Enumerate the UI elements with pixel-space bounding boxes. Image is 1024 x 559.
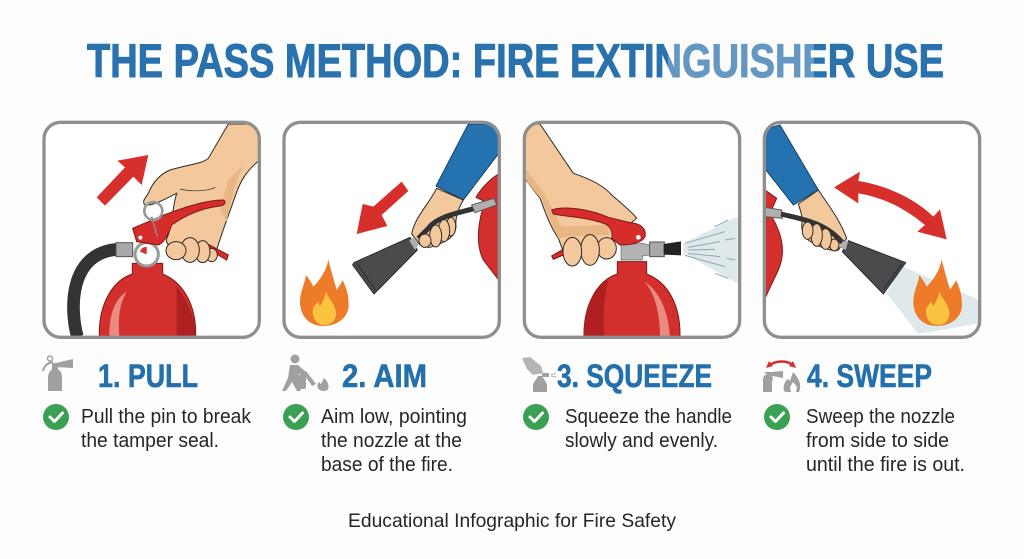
spray — [683, 217, 738, 283]
panel: aim illustration — [284, 122, 500, 337]
text block: aim: base of the fire. — [321, 454, 453, 476]
step heading: squeeze: 3. SQUEEZE — [557, 358, 712, 394]
step heading: sweep: 4. SWEEP — [807, 358, 932, 394]
text block: pull: Pull the pin to break — [81, 406, 252, 428]
icon: hand squeezing — [522, 357, 556, 392]
hand — [798, 190, 847, 250]
text block: squeeze: slowly and evenly. — [565, 430, 718, 452]
text block: squeeze — [565, 406, 732, 452]
sleeve — [763, 125, 818, 205]
arrow: aim low — [357, 182, 408, 234]
check icon: pull — [43, 404, 69, 430]
text block: sweep: from side to side — [806, 430, 949, 452]
icon: sweep — [763, 361, 800, 392]
icon: extinguisher — [43, 356, 73, 391]
extinguisher body — [584, 241, 681, 337]
hose — [73, 249, 117, 337]
text block: aim — [321, 406, 467, 476]
text block: sweep: Sweep the nozzle — [806, 406, 955, 428]
extinguisher cut-off — [476, 173, 500, 282]
check icon: sweep — [764, 404, 790, 430]
footer caption: Educational Infographic for Fire Safety — [348, 510, 676, 532]
hose — [781, 214, 842, 243]
text block: pull: the tamper seal. — [81, 430, 219, 452]
hose — [418, 208, 475, 238]
extinguisher body — [99, 243, 196, 337]
text block: squeeze: Squeeze the handle — [565, 406, 732, 428]
nozzle — [840, 241, 906, 294]
check icon: squeeze — [523, 404, 549, 430]
text block: sweep: until the fire is out. — [806, 454, 965, 476]
text block: pull — [81, 406, 252, 452]
panel: squeeze illustration — [523, 122, 740, 337]
arrow: pull up — [97, 155, 148, 206]
nozzle — [353, 237, 418, 294]
text block: aim: the nozzle at the — [321, 430, 462, 452]
flame — [913, 259, 962, 326]
panel: sweep illustration — [763, 122, 980, 337]
step heading: aim: 2. AIM — [342, 358, 427, 394]
text block: sweep — [806, 406, 965, 476]
hand — [412, 188, 463, 247]
fingers — [419, 217, 456, 247]
panel: pull illustration — [44, 122, 260, 337]
arrow: sweep — [834, 172, 947, 239]
check icon: aim — [283, 404, 309, 430]
sleeve — [436, 124, 500, 200]
text block: aim: Aim low, pointing — [321, 406, 467, 428]
flame — [300, 259, 349, 326]
extinguisher cut-off — [765, 190, 782, 298]
hand and lever — [133, 124, 260, 263]
step heading: pull: 1. PULL — [98, 358, 198, 394]
icon: person aiming extinguisher — [282, 354, 329, 391]
fingers — [802, 222, 839, 251]
hand and lever — [523, 124, 645, 266]
spray — [887, 266, 979, 334]
